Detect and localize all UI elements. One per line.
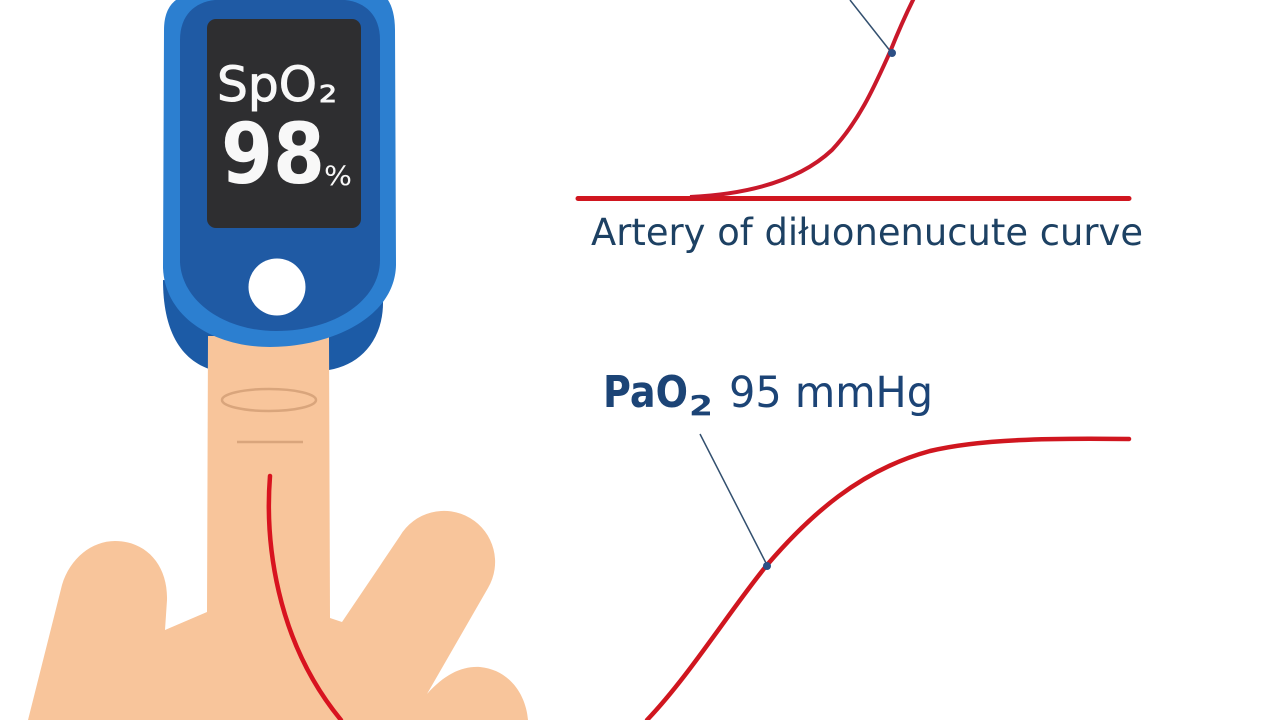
marker dot — [888, 49, 896, 57]
finger crease line — [237, 441, 303, 443]
marker dot — [763, 562, 771, 570]
SpO2 label: SpO — [217, 57, 317, 113]
pulse oximeter device — [163, 0, 396, 347]
baseline — [578, 196, 1129, 201]
device button — [248, 258, 306, 316]
device inner panel — [180, 0, 380, 331]
red curve — [647, 439, 1129, 720]
red curve — [690, 0, 914, 197]
palm and fingers — [28, 336, 528, 720]
chart caption: Artery of diłuonenucute curve — [591, 211, 1143, 254]
PaO2 label: PaO — [603, 367, 688, 418]
SpO2 label: 2 — [319, 82, 337, 108]
98 percent reading: % — [324, 161, 352, 192]
98 percent reading: 98 — [221, 105, 325, 203]
leader line — [850, 0, 891, 52]
top oxygen curve chart — [578, 0, 1129, 198]
device lower shell — [163, 280, 383, 370]
PaO2 label — [603, 367, 933, 422]
bottom oxygen curve chart — [647, 434, 1129, 720]
display screen — [207, 19, 361, 228]
hand with raised finger — [28, 336, 528, 720]
PaO2 label: 2 — [689, 389, 713, 422]
PaO2 label: 95 mmHg — [729, 368, 933, 418]
finger crease oval — [222, 389, 316, 411]
artery line in finger — [269, 476, 341, 720]
leader line — [700, 434, 767, 565]
device body — [163, 0, 396, 347]
